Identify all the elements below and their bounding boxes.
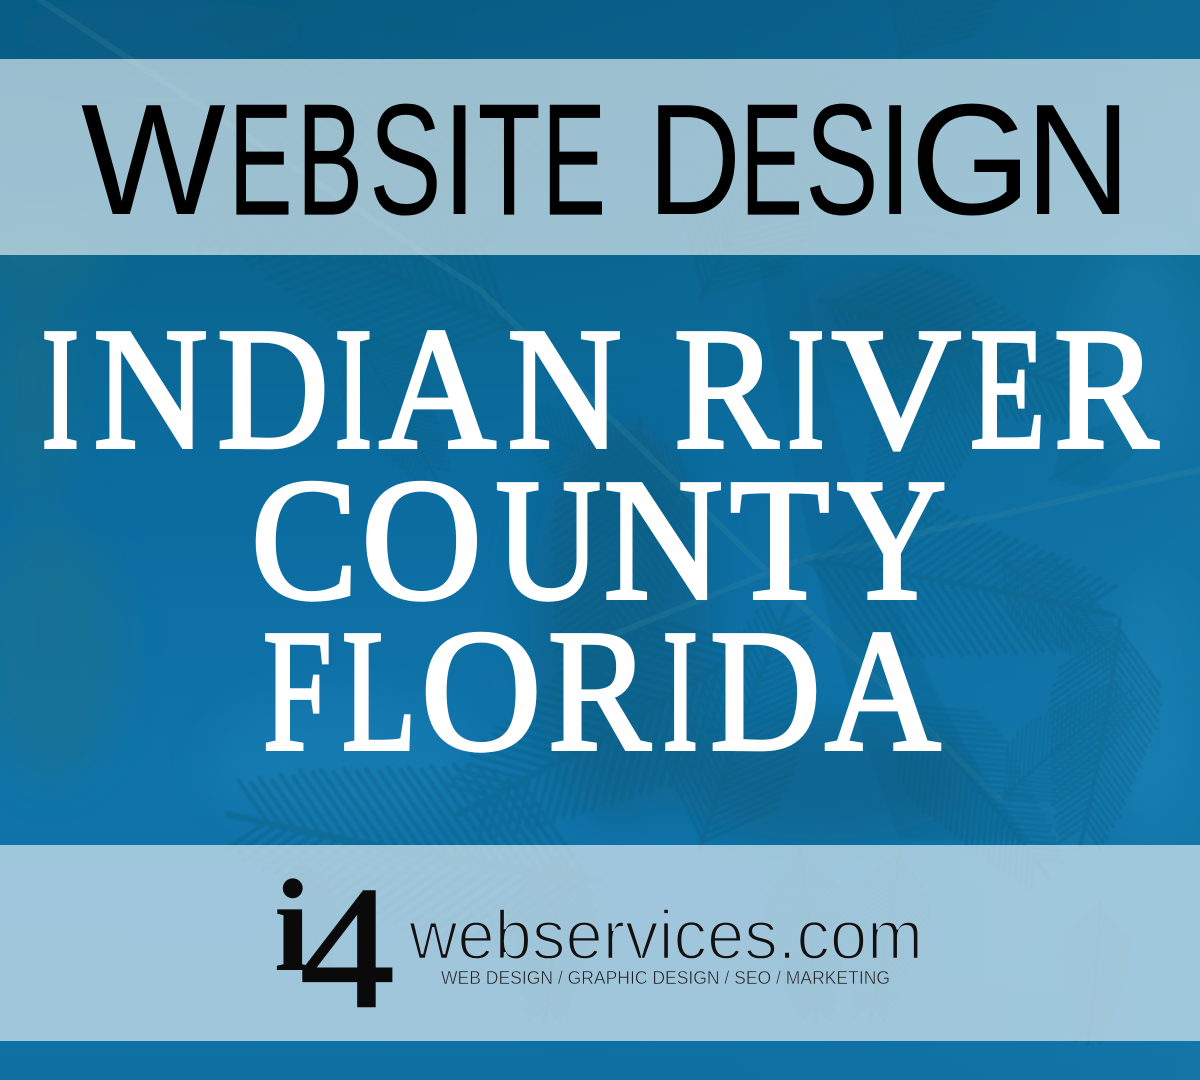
title line: florida: L	[342, 595, 416, 787]
heading: website design: I	[878, 72, 913, 248]
title line: florida: O	[421, 594, 541, 787]
title line: florida: R	[548, 594, 651, 787]
title line: indian river: I	[334, 292, 372, 485]
title line: florida	[263, 594, 941, 788]
heading: website design	[81, 71, 1131, 248]
title line: indian river: A	[379, 293, 496, 485]
top band	[0, 59, 1200, 255]
title line: indian river: N	[507, 292, 622, 485]
heading: website design: W	[81, 71, 226, 247]
heading: website design: T	[478, 73, 540, 248]
title line: county: T	[730, 443, 830, 636]
heading: website design: E	[740, 73, 803, 248]
title: indian river county florida	[42, 292, 1159, 788]
heading: website design: S	[805, 71, 879, 248]
logo mark: i4: i	[274, 852, 311, 999]
logo: i4webservices.com	[274, 852, 923, 1044]
title line: indian river	[42, 292, 1159, 485]
title line: county: Y	[837, 444, 947, 636]
title line: indian river: R	[1054, 292, 1159, 485]
title line: indian river: V	[832, 293, 961, 485]
heading: website design: B	[297, 71, 363, 248]
logo wordmark: webservices.com	[408, 896, 923, 974]
title line: florida: I	[663, 596, 698, 788]
title line: indian river: I	[787, 292, 825, 485]
logo mark: i4: 4	[300, 852, 394, 1044]
title line: indian river: N	[93, 292, 208, 485]
heading: website design: N	[1025, 72, 1131, 248]
heading: website design: G	[910, 72, 1032, 248]
title line: county: N	[604, 443, 723, 636]
title line: indian river: I	[42, 292, 79, 485]
heading: website design: E	[542, 71, 606, 248]
tagline: WEB DESIGN / GRAPHIC DESIGN / SEO / MARKETING	[441, 967, 890, 988]
title line: florida: D	[710, 595, 821, 787]
title line: indian river: E	[970, 292, 1045, 485]
heading: website design: E	[229, 71, 292, 248]
title line: florida: A	[825, 595, 941, 788]
heading: website design: D	[648, 71, 741, 248]
bottom band	[0, 845, 1200, 1041]
title line: indian river: D	[217, 292, 329, 485]
heading: website design: S	[369, 71, 442, 248]
title line: county: O	[361, 443, 482, 636]
title line: county: C	[251, 444, 358, 637]
title line: florida: F	[263, 594, 332, 787]
title line: county: U	[496, 443, 601, 636]
title line: county	[251, 443, 947, 637]
heading: website design: I	[442, 72, 477, 248]
title line: indian river: R	[674, 292, 779, 485]
